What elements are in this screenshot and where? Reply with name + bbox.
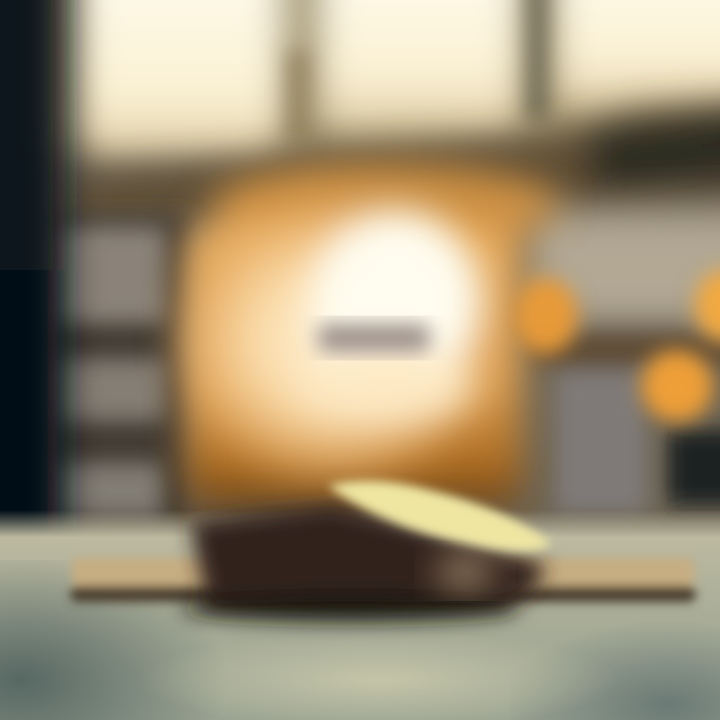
- dark left column: [0, 0, 65, 560]
- central light: [165, 185, 505, 495]
- table surface: [0, 510, 720, 720]
- window mullions: [288, 0, 547, 140]
- central glow panel: [186, 163, 560, 510]
- window panes: [0, 0, 720, 160]
- right lower panels: [530, 335, 720, 512]
- pale yellow disc: [328, 481, 552, 551]
- right shelf panels: [530, 212, 720, 322]
- dark slipper shape: [180, 505, 545, 621]
- highlight under the pale disc: [437, 556, 493, 588]
- left shelf panels: [50, 215, 190, 525]
- dark horizontal band: [70, 100, 720, 225]
- tan beam: [70, 558, 696, 602]
- bokeh orange lights: [514, 270, 720, 422]
- blurred central label: [318, 324, 430, 352]
